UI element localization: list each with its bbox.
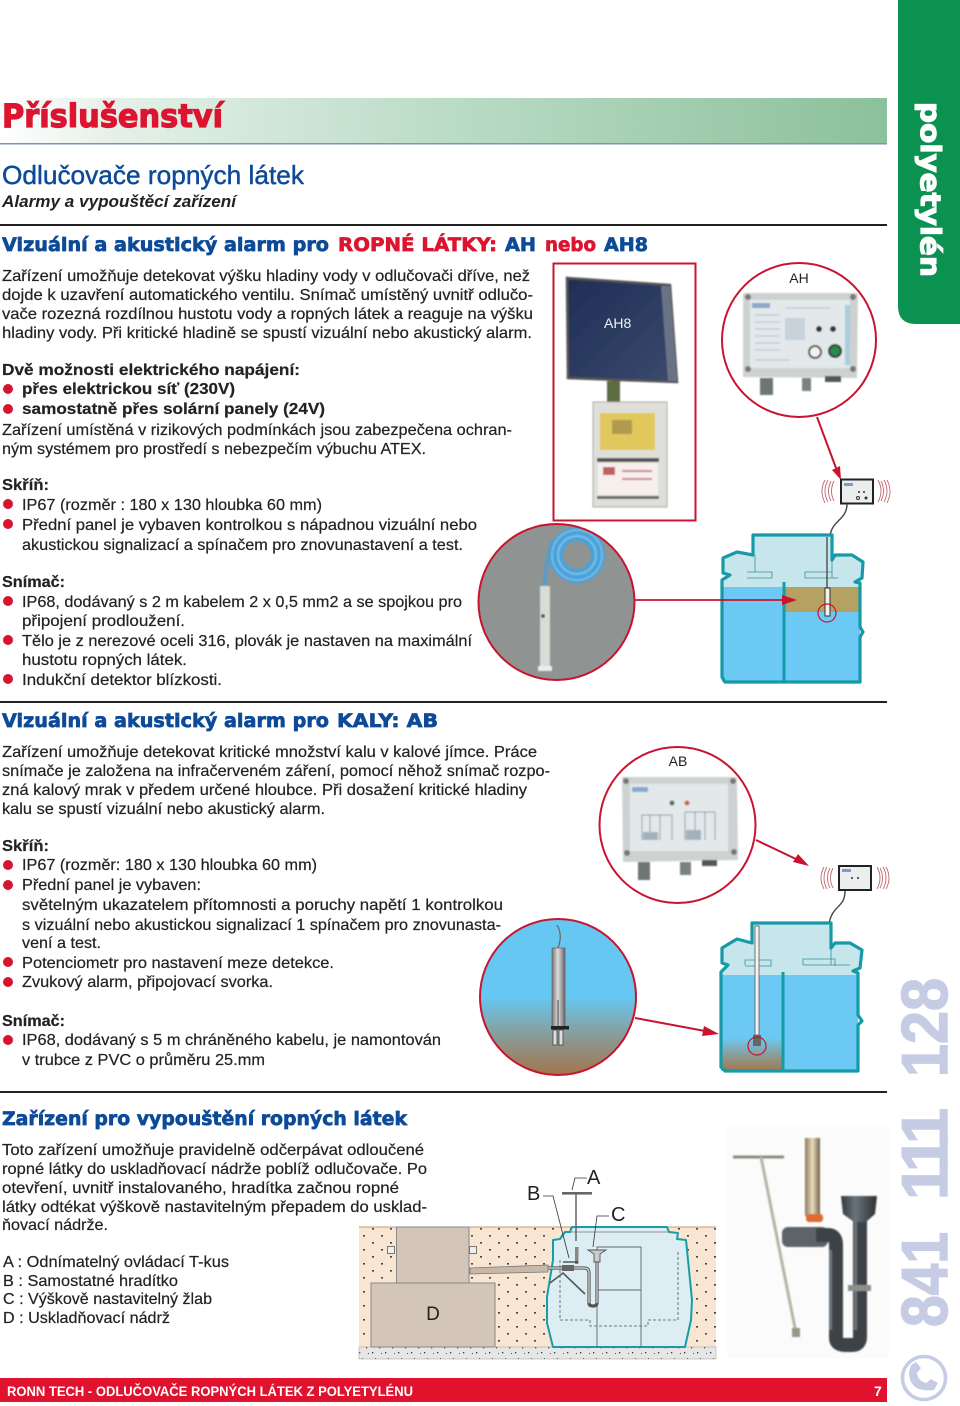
arrow: sensor to tank (635, 595, 797, 605)
footer bar (0, 1378, 887, 1402)
text: power options: ným systémem pro prostředí s nebezpečím výbuchu ATEX. (2, 441, 426, 458)
subtitle: Odlučovače ropných látek (1, 160, 305, 211)
text: alarm description: dojde k uzavření automatického ventilu. Snímač umístěný uvnitř odlučo- (2, 287, 533, 304)
text: discharge description (2, 1142, 427, 1234)
text: Skříň AB: Přední panel je vybaven: (22, 877, 201, 894)
subtitle: Odlučovače ropných látek: Alarmy a vypouštěcí zařízení (1, 193, 238, 211)
subtitle: Odlučovače ropných látek: Odlučovače ropných látek (2, 160, 305, 190)
arrow: AB to alarm (756, 840, 809, 866)
text: discharge description: otevření, uvnitř instalovaného, hradítka začnou ropné (2, 1180, 399, 1197)
photo panel: AH8 solar unit: AH8 (604, 315, 631, 331)
tank diagram: sludge (721, 923, 862, 1071)
legend: parts A-D: C : Výškově nastavitelný žlab (3, 1291, 212, 1308)
text: Snímač: Indukční detektor blízkosti. (22, 672, 222, 689)
arrow: sludge sensor to tank (635, 1018, 719, 1036)
heading: alarm pro ropné látky: AH8 (604, 234, 648, 256)
illustration circle: sludge sensor (480, 919, 636, 1075)
text: power options: samostatně přes solární panely (24V) (22, 401, 325, 418)
text: Snímač AB: IP68, dodávaný s 5 m chráněného kabelu, je namontován (22, 1032, 441, 1049)
text: Skříň AB: Skříň: (2, 838, 49, 855)
text: Skříň AB: Zvukový alarm, připojovací svorka. (22, 974, 273, 991)
phone number: 128 (888, 978, 960, 1077)
photo: discharge device parts (727, 1127, 889, 1358)
text: Snímač (2, 574, 473, 689)
tank diagram: oil separator (722, 535, 863, 682)
text: Skříň: Skříň: (2, 477, 49, 494)
footer bar: 7 (874, 1383, 882, 1399)
footer bar: RONN TECH - ODLUČOVAČE ROPNÝCH LÁTEK Z POLYETYLÉNU (7, 1382, 413, 1399)
text: alarm description (2, 268, 533, 342)
heading: alarm pro ropné látky: nebo (545, 234, 596, 256)
text: sludge alarm description: kalu se spustí vizuální nebo akustický alarm. (2, 801, 325, 818)
text: sludge alarm description: snímače je založena na infračerveném záření, pomocí něhož snímač rozpo- (2, 763, 550, 780)
photo circle: AB control box (600, 747, 756, 903)
diagram: installation cross-section (359, 1167, 716, 1359)
text: alarm description: hladiny vody. Při kritické hladině se spustí vizuální nebo akustický alarm. (2, 325, 532, 342)
text: alarm description: vače rozezná rozdílnou hustotu vody a ropných látek a reaguje na výšku (2, 306, 533, 323)
icon: phone (902, 1356, 946, 1400)
text: Snímač: Snímač: (2, 574, 65, 591)
arrow: AH to alarm (817, 417, 841, 480)
photo panel: AH8 solar unit (554, 264, 696, 520)
heading: alarm pro ropné látky (2, 233, 648, 256)
callout: B: B (527, 1183, 540, 1205)
legend: parts A-D: D : Uskladňovací nádrž (3, 1310, 170, 1327)
legend: parts A-D (3, 1254, 229, 1327)
text: Skříň: Přední panel je vybaven kontrolkou s nápadnou vizuální nebo (22, 517, 477, 534)
heading: alarm pro ropné látky: ROPNÉ LÁTKY: (338, 233, 497, 256)
legend: parts A-D: B : Samostatné hradítko (3, 1273, 178, 1290)
text: Snímač: Tělo je z nerezové oceli 316, plovák je nastaven na maximální (22, 633, 473, 650)
text: Skříň: IP67 (rozměr : 180 x 130 hloubka 60 mm) (22, 497, 322, 514)
diagram: installation cross-section: D (426, 1304, 440, 1325)
legend: parts A-D: A : Odnímatelný ovládací T-kus (3, 1254, 229, 1271)
phone number (888, 978, 960, 1327)
text: power options: Zařízení umístěná v rizikových podmínkách jsou zabezpečena ochran- (2, 422, 512, 439)
text: Snímač AB: v trubce z PVC o průměru 25.mm (22, 1051, 265, 1069)
title band: Příslušenství (0, 97, 887, 144)
heading: alarm pro ropné látky: AH (505, 234, 536, 256)
tab: polyetylén: polyetylén (914, 102, 947, 277)
text: sludge alarm description (2, 744, 550, 818)
heading: alarm pro kaly: KALY: AB (337, 710, 438, 732)
phone number: 111 (888, 1108, 960, 1200)
text: sludge alarm description: zná kalový mrak v předem určené hloubce. Při dosažení kritické hladiny (2, 782, 527, 799)
text: discharge description: Toto zařízení umožňuje pravidelně odčerpávat odloučené (2, 1142, 424, 1159)
text: power options (2, 362, 512, 458)
text: discharge description: ňovací nádrže. (2, 1217, 108, 1234)
icon: alarm device AB (821, 866, 889, 924)
text: Skříň AB: vení a test. (22, 935, 101, 952)
photo circle: AH control box (722, 263, 876, 417)
tab: polyetylén (898, 0, 960, 324)
text: Snímač AB: Snímač: (2, 1013, 65, 1030)
text: Skříň AB: světelným ukazatelem přítomnosti a poruchy napětí 1 kontrolkou (22, 897, 503, 914)
text: Snímač AB (2, 1013, 441, 1069)
photo circle: oil sensor (478, 524, 634, 680)
heading: alarm pro kaly: Vizuální a akustický alarm pro (2, 710, 329, 732)
text: Skříň AB (2, 838, 503, 991)
text: discharge description: ropné látky do uskladňovací nádrže poblíž odlučovače. Po (2, 1161, 427, 1178)
text: Skříň (2, 477, 477, 554)
text: Snímač: připojení prodloužení. (22, 613, 185, 630)
text: power options: přes elektrickou síť (230V) (22, 381, 235, 398)
text: Skříň AB: s vizuální nebo akustickou signalizací 1 spínačem pro znovunasta- (22, 917, 501, 934)
icon: alarm device AH (822, 480, 890, 536)
text: Skříň: akustickou signalizací a spínačem pro znovunastavení a test. (22, 537, 463, 554)
text: Skříň AB: Potenciometr pro nastavení meze detekce. (22, 955, 334, 972)
phone number: 841 (888, 1232, 960, 1327)
photo circle: AH control box: AH (789, 270, 809, 286)
text: Snímač: IP68, dodávaný s 2 m kabelem 2 x 0,5 mm2 a se spojkou pro (22, 594, 462, 611)
text: alarm description: Zařízení umožňuje detekovat výšku hladiny vody v odlučovači dříve, než (2, 268, 530, 285)
text: Snímač: hustotu ropných látek. (22, 652, 187, 669)
callout: A: A (587, 1167, 601, 1189)
text: sludge alarm description: Zařízení umožňuje detekovat kritické množství kalu v kalové jímce. Práce (2, 744, 537, 761)
callout: C: C (611, 1204, 625, 1226)
text: power options: Dvě možnosti elektrického napájení: (2, 362, 300, 379)
text: Skříň AB: IP67 (rozměr: 180 x 130 hloubka 60 mm) (22, 857, 317, 874)
photo circle: AB control box: AB (669, 753, 687, 769)
text: discharge description: látky odtékat výškově nastavitelným přepadem do usklad- (2, 1199, 427, 1216)
heading: zařízení pro vypouštění: Zařízení pro vypouštění ropných látek (2, 1108, 407, 1130)
title band: Příslušenství: Příslušenství (2, 97, 225, 135)
heading: alarm pro ropné látky: Vizuální a akustický alarm pro (2, 234, 329, 256)
